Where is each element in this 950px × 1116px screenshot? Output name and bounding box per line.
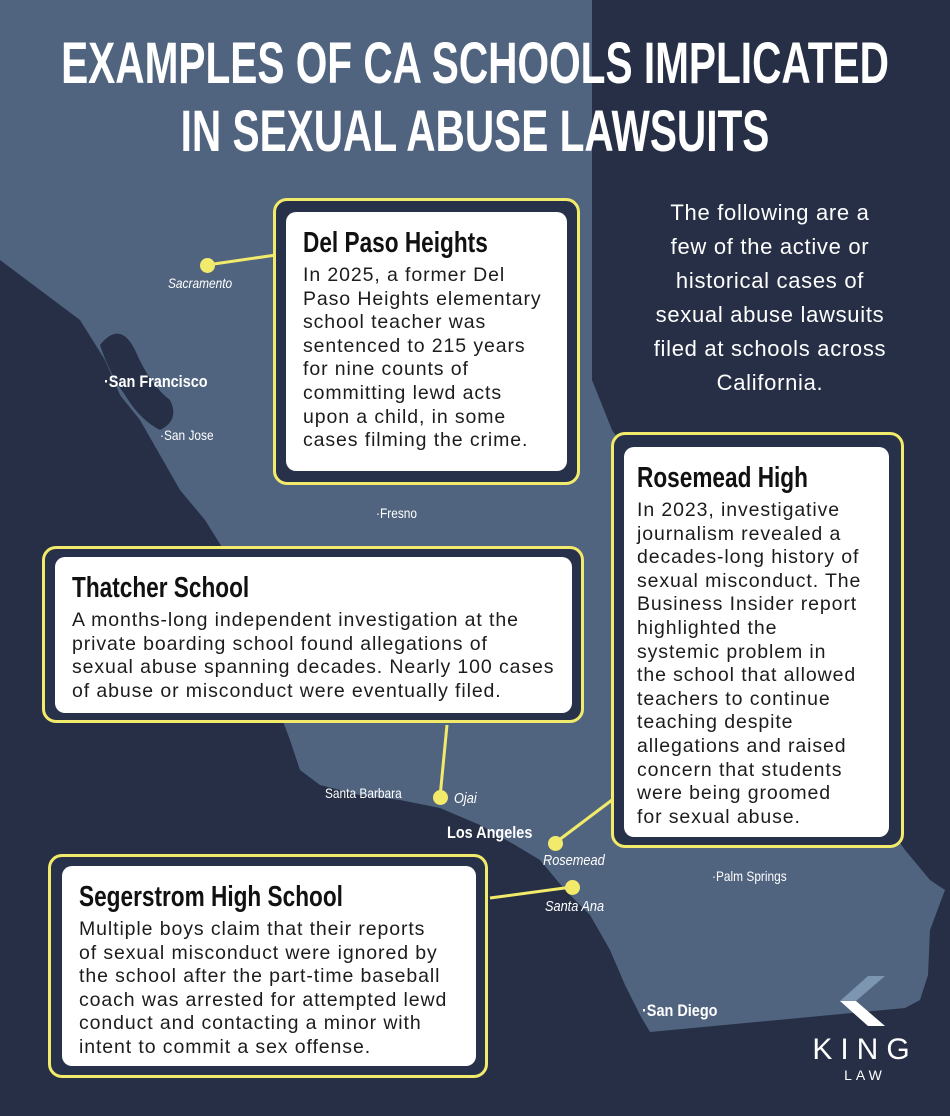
panel: Del Paso Heights: sentenced to 215 years bbox=[303, 335, 526, 357]
panel: Rosemead High: journalism revealed a bbox=[637, 523, 841, 545]
city labels: ·San Jose bbox=[160, 427, 214, 443]
panel: Thatcher School bbox=[42, 546, 584, 723]
title: EXAMPLES OF CA SCHOOLS IMPLICATED bbox=[61, 31, 889, 96]
logo: King Law: LAW bbox=[844, 1067, 886, 1083]
city labels: Los Angeles bbox=[447, 823, 532, 842]
panel: Del Paso Heights bbox=[273, 198, 580, 485]
panel: Rosemead High: In 2023, investigative bbox=[637, 499, 840, 521]
panel: Del Paso Heights: Paso Heights elementary bbox=[303, 288, 542, 310]
panel: Segerstrom High School: intent to commit a sex offense. bbox=[79, 1036, 371, 1058]
city labels: Rosemead bbox=[543, 852, 605, 869]
panel: Rosemead High bbox=[611, 432, 904, 848]
title bbox=[61, 31, 889, 164]
logo: King Law: KING bbox=[812, 1033, 918, 1066]
panel: Rosemead High: for sexual abuse. bbox=[637, 806, 801, 828]
panel: Segerstrom High School: the school after the part-time baseball bbox=[79, 965, 440, 987]
city labels: Santa Ana bbox=[545, 898, 604, 915]
panel: Rosemead High: decades-long history of bbox=[637, 546, 859, 568]
city labels: Ojai bbox=[454, 790, 477, 807]
panel: Segerstrom High School: coach was arrested for attempted lewd bbox=[79, 989, 447, 1011]
intro text: filed at schools across bbox=[654, 336, 886, 361]
panel: Rosemead High: concern that students bbox=[637, 759, 842, 781]
panel: Rosemead High: the school that allowed bbox=[637, 664, 856, 686]
panel: Thatcher School: of abuse or misconduct were eventually filed. bbox=[72, 680, 502, 702]
panel: Del Paso Heights: Del Paso Heights bbox=[303, 227, 488, 259]
panel: Thatcher School: sexual abuse spanning decades. Nearly 100 cases bbox=[72, 656, 554, 678]
panel: Thatcher School: Thatcher School bbox=[72, 572, 249, 604]
panel: Del Paso Heights: upon a child, in some bbox=[303, 406, 506, 428]
panel: Rosemead High: allegations and raised bbox=[637, 735, 847, 757]
panel: Segerstrom High School bbox=[48, 854, 488, 1078]
panel: Rosemead High: were being groomed bbox=[637, 782, 831, 804]
city labels: Santa Barbara bbox=[325, 785, 402, 801]
panel: Del Paso Heights: In 2025, a former Del bbox=[303, 264, 505, 286]
panel: Segerstrom High School: Segerstrom High School bbox=[79, 881, 343, 913]
panel: Rosemead High: Rosemead High bbox=[637, 462, 808, 494]
city labels: ·San Francisco bbox=[104, 372, 208, 391]
intro text: few of the active or bbox=[671, 234, 869, 259]
panel: Rosemead High: Business Insider report bbox=[637, 593, 857, 615]
panel: Rosemead High: highlighted the bbox=[637, 617, 777, 639]
panel: Thatcher School: private boarding school found allegations of bbox=[72, 633, 488, 655]
intro text: historical cases of bbox=[676, 268, 864, 293]
intro text: sexual abuse lawsuits bbox=[656, 302, 884, 327]
city labels: Sacramento bbox=[168, 275, 232, 291]
panel: Segerstrom High School: of sexual misconduct were ignored by bbox=[79, 942, 438, 964]
panel: Rosemead High: systemic problem in bbox=[637, 641, 826, 663]
panel: Del Paso Heights: cases filming the crime. bbox=[303, 429, 528, 451]
intro text bbox=[654, 200, 886, 395]
city labels: ·Fresno bbox=[376, 505, 417, 521]
intro text: The following are a bbox=[670, 200, 870, 225]
panel: Thatcher School: A months-long independent investigation at the bbox=[72, 609, 519, 631]
title: IN SEXUAL ABUSE LAWSUITS bbox=[181, 99, 769, 164]
panel: Rosemead High: teaching despite bbox=[637, 711, 793, 733]
logo: King Law bbox=[812, 976, 918, 1083]
panel: Del Paso Heights: school teacher was bbox=[303, 311, 486, 333]
panel: Rosemead High: teachers to continue bbox=[637, 688, 831, 710]
panel: Del Paso Heights: committing lewd acts bbox=[303, 382, 502, 404]
marker dots bbox=[200, 258, 580, 895]
panel: Del Paso Heights: for nine counts of bbox=[303, 358, 469, 380]
panel: Segerstrom High School: Multiple boys claim that their reports bbox=[79, 918, 425, 940]
city labels: ·Palm Springs bbox=[712, 868, 787, 884]
panel: Segerstrom High School: conduct and contacting a minor with bbox=[79, 1012, 422, 1034]
intro text: California. bbox=[717, 370, 823, 395]
panel: Rosemead High: sexual misconduct. The bbox=[637, 570, 861, 592]
city labels: ·San Diego bbox=[642, 1001, 717, 1020]
